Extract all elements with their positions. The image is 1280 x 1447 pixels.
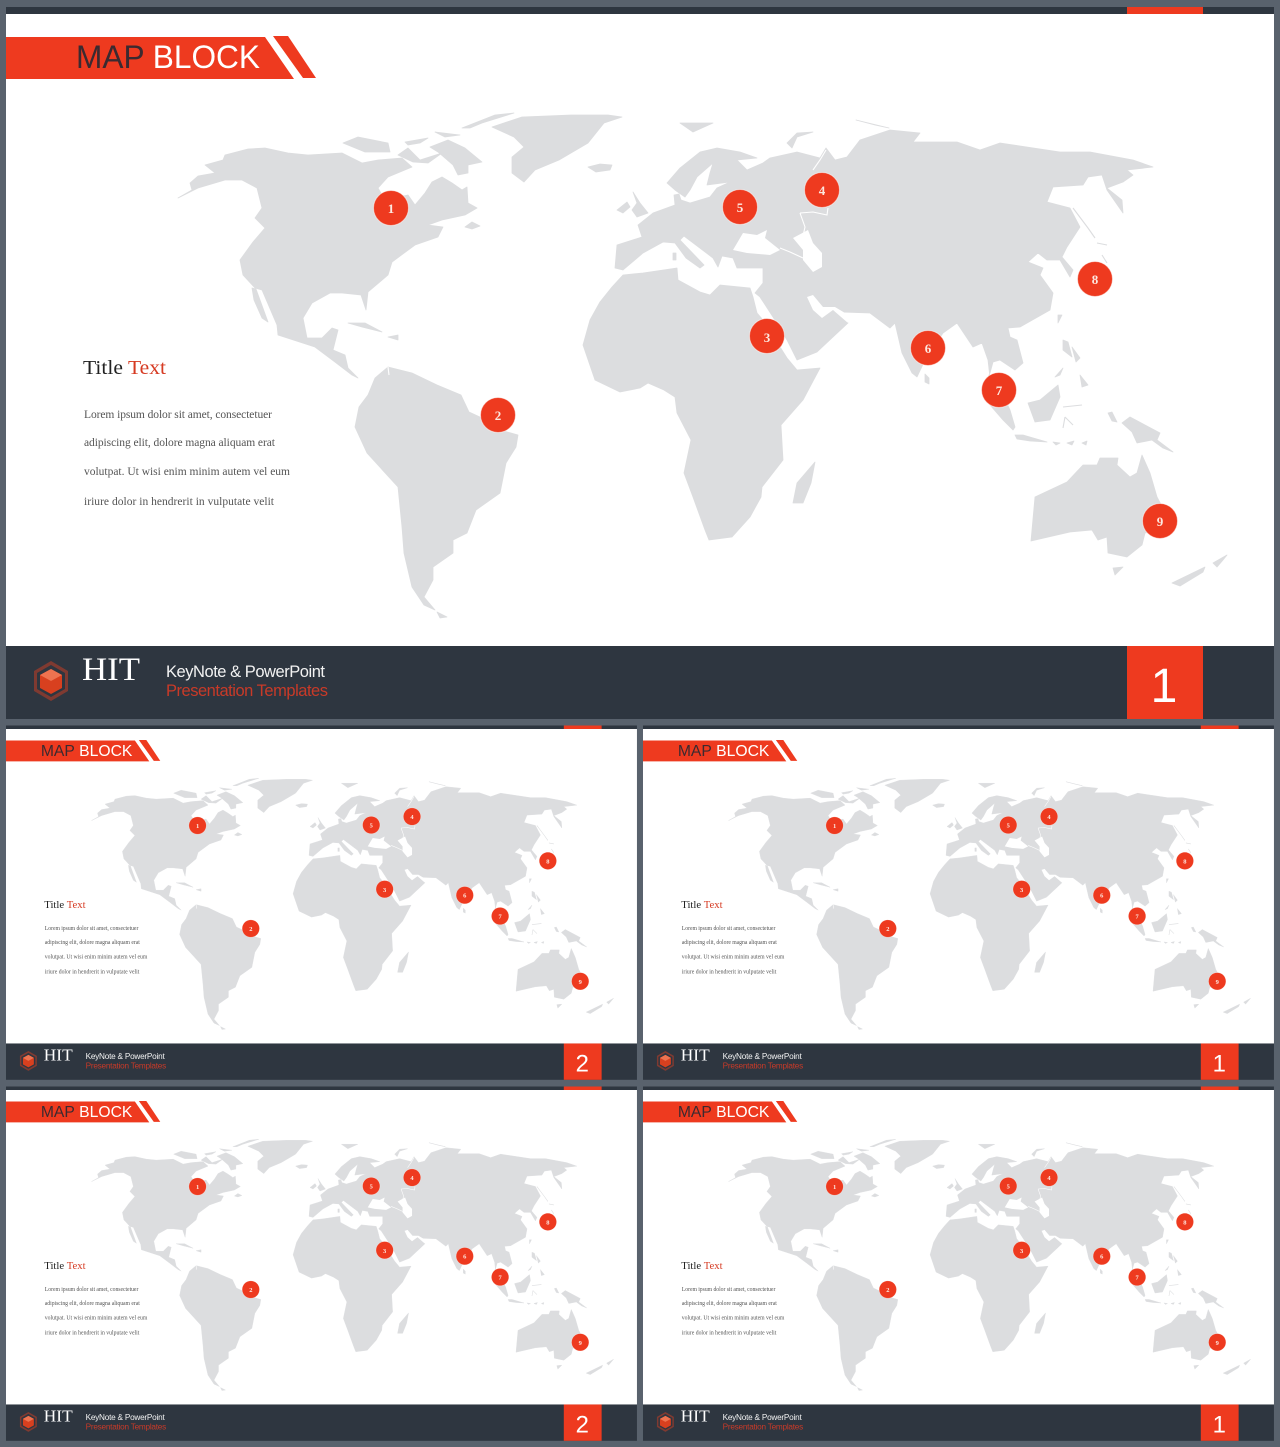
slide body xyxy=(6,14,1274,646)
panel: bottom-left thumbnail: 7 xyxy=(498,1275,502,1282)
panel: top-left thumbnail: Lorem ipsum dolor sit amet, consectetuer xyxy=(45,926,138,932)
panel: bottom-right thumbnail: volutpat. Ut wisi enim minim autem vel eum xyxy=(682,1315,785,1321)
panel: bottom-left thumbnail: 1 xyxy=(196,1184,199,1191)
panel: bottom-right thumbnail: 6 xyxy=(1100,1254,1104,1261)
icon: hexagon cube logo xyxy=(34,661,68,701)
panel: bottom-right thumbnail: 4 xyxy=(1047,1175,1051,1182)
panel: bottom-left thumbnail xyxy=(6,1087,637,1441)
panel: top-right thumbnail: Lorem ipsum dolor sit amet, consectetuer xyxy=(682,926,775,932)
panel: bottom-right thumbnail xyxy=(643,1087,1274,1441)
panel: bottom-left thumbnail: 9 xyxy=(579,1340,582,1347)
panel: top-right thumbnail: 8 xyxy=(1183,858,1187,865)
panel: top-right thumbnail: 7 xyxy=(1135,914,1139,921)
footer tagline: Presentation Templates xyxy=(166,682,328,700)
panel: top-right thumbnail: 3 xyxy=(1020,887,1023,894)
map pins: 8 xyxy=(1092,272,1099,287)
panel: bottom-left thumbnail: iriure dolor in hendrerit in vulputate velit xyxy=(45,1330,140,1336)
panel: top-right thumbnail: 9 xyxy=(1216,979,1219,986)
panel: bottom-right thumbnail: 3 xyxy=(1020,1248,1023,1255)
map pins: 6 xyxy=(925,341,932,356)
panel: bottom-left thumbnail: 4 xyxy=(410,1175,414,1182)
panel: top-left thumbnail: HIT xyxy=(44,1045,73,1064)
panel: top-right thumbnail: Presentation Templates xyxy=(723,1061,803,1070)
panel: top-right thumbnail: MAP BLOCK xyxy=(678,743,770,760)
panel: top-left thumbnail: 1 xyxy=(196,823,199,830)
panel: bottom-right thumbnail: 1 xyxy=(1213,1411,1226,1438)
panel: bottom-right thumbnail: Lorem ipsum dolor sit amet, consectetuer xyxy=(682,1287,775,1293)
panel: top-left thumbnail: 6 xyxy=(463,893,467,900)
panel: top-left thumbnail: 7 xyxy=(498,914,502,921)
panel: top-left thumbnail: KeyNote & PowerPoint xyxy=(86,1052,165,1061)
panel: bottom-left thumbnail: KeyNote & PowerPoint xyxy=(86,1413,165,1422)
panel: top-left thumbnail: 2 xyxy=(576,1050,589,1077)
body text xyxy=(84,409,290,508)
panel: bottom-left thumbnail: 5 xyxy=(370,1184,373,1191)
panel: top-left thumbnail: 5 xyxy=(370,823,373,830)
panel: bottom-right thumbnail: Presentation Templates xyxy=(723,1422,803,1431)
slide number: 1 xyxy=(1151,660,1177,713)
top red tab xyxy=(1127,7,1203,14)
world map xyxy=(178,113,1227,618)
panel: top-left thumbnail: adipiscing elit, dolore magna aliquam erat xyxy=(45,940,140,946)
panel: top-right thumbnail: iriure dolor in hendrerit in vulputate velit xyxy=(682,969,777,975)
panel: top-right thumbnail: 1 xyxy=(833,823,836,830)
heading banner xyxy=(6,36,316,79)
map pins: 7 xyxy=(996,383,1003,398)
panel: top-right thumbnail: HIT xyxy=(681,1045,710,1064)
panel: top-left thumbnail: 2 xyxy=(249,926,252,933)
panel: bottom-left thumbnail: Lorem ipsum dolor sit amet, consectetuer xyxy=(45,1287,138,1293)
panel: bottom-right thumbnail: iriure dolor in hendrerit in vulputate velit xyxy=(682,1330,777,1336)
panel: bottom-right thumbnail: 1 xyxy=(833,1184,836,1191)
heading banner: MAP BLOCK xyxy=(76,39,260,75)
panel: top-left thumbnail: Presentation Templates xyxy=(86,1061,166,1070)
footer tagline xyxy=(166,663,328,700)
panel: top-right thumbnail: 4 xyxy=(1047,814,1051,821)
body text: Lorem ipsum dolor sit amet, consectetuer xyxy=(84,409,272,421)
panel: top-left thumbnail: 3 xyxy=(383,887,386,894)
panel: top-right thumbnail: volutpat. Ut wisi enim minim autem vel eum xyxy=(682,954,785,960)
brand name: HIT xyxy=(82,652,140,688)
panel: top-left thumbnail: 9 xyxy=(579,979,582,986)
panel: bottom-left thumbnail: Presentation Templates xyxy=(86,1422,166,1431)
panel: top-left thumbnail: 8 xyxy=(546,858,550,865)
panel: bottom-right thumbnail: 7 xyxy=(1135,1275,1139,1282)
panel: top-right thumbnail: adipiscing elit, dolore magna aliquam erat xyxy=(682,940,777,946)
map pins: 9 xyxy=(1157,514,1164,529)
map pins: 3 xyxy=(764,330,771,345)
panel: bottom-left thumbnail: 2 xyxy=(249,1287,252,1294)
top strip xyxy=(6,7,1274,14)
panel: top-left thumbnail: volutpat. Ut wisi enim minim autem vel eum xyxy=(45,954,148,960)
panel: bottom-left thumbnail: 6 xyxy=(463,1254,467,1261)
panel: top-right thumbnail: 6 xyxy=(1100,893,1104,900)
panel: bottom-right thumbnail: 8 xyxy=(1183,1219,1187,1226)
panel: top-right thumbnail: 5 xyxy=(1007,823,1010,830)
panel: bottom-right thumbnail: 2 xyxy=(886,1287,889,1294)
panel: bottom-right thumbnail: 5 xyxy=(1007,1184,1010,1191)
panel: bottom-right thumbnail: Title Text xyxy=(681,1261,723,1272)
panel: top-right thumbnail: KeyNote & PowerPoint xyxy=(723,1052,802,1061)
slide number xyxy=(1127,646,1203,719)
panel: bottom-right thumbnail: HIT xyxy=(681,1406,710,1425)
panel: bottom-right thumbnail: MAP BLOCK xyxy=(678,1104,770,1121)
panel: bottom-right thumbnail: 9 xyxy=(1216,1340,1219,1347)
body text: adipiscing elit, dolore magna aliquam erat xyxy=(84,437,276,449)
panel: bottom-left thumbnail: 8 xyxy=(546,1219,550,1226)
body text: volutpat. Ut wisi enim minim autem vel eum xyxy=(84,466,290,478)
panel: top-left thumbnail: 4 xyxy=(410,814,414,821)
panel: bottom-left thumbnail: volutpat. Ut wisi enim minim autem vel eum xyxy=(45,1315,148,1321)
map pins: 1 xyxy=(388,201,394,216)
panel: bottom-left thumbnail: 2 xyxy=(576,1411,589,1438)
panel: top-right thumbnail: 1 xyxy=(1213,1050,1226,1077)
map pins: 2 xyxy=(495,408,501,423)
panel: top-left thumbnail xyxy=(6,726,637,1080)
body text: iriure dolor in hendrerit in vulputate velit xyxy=(84,496,275,508)
panel: bottom-right thumbnail: adipiscing elit, dolore magna aliquam erat xyxy=(682,1301,777,1307)
panel: bottom-left thumbnail: 3 xyxy=(383,1248,386,1255)
panel: top-left thumbnail: iriure dolor in hendrerit in vulputate velit xyxy=(45,969,140,975)
panel: top-right thumbnail: Title Text xyxy=(681,900,723,911)
title text: Title Text xyxy=(83,357,166,379)
panel: bottom-right thumbnail: KeyNote & PowerPoint xyxy=(723,1413,802,1422)
panel: bottom-left thumbnail: adipiscing elit, dolore magna aliquam erat xyxy=(45,1301,140,1307)
panel: top-left thumbnail: Title Text xyxy=(44,900,86,911)
panel: top-right thumbnail: 2 xyxy=(886,926,889,933)
panel: top-left thumbnail: MAP BLOCK xyxy=(41,743,133,760)
map pins xyxy=(374,172,1178,538)
footer bar xyxy=(6,646,1274,719)
panel: top-right thumbnail xyxy=(643,726,1274,1080)
map pins: 4 xyxy=(819,183,826,198)
panel: bottom-left thumbnail: HIT xyxy=(44,1406,73,1425)
panel: main slide xyxy=(6,7,1274,719)
panel: bottom-left thumbnail: MAP BLOCK xyxy=(41,1104,133,1121)
map pins: 5 xyxy=(737,200,744,215)
panel: bottom-left thumbnail: Title Text xyxy=(44,1261,86,1272)
footer tagline: KeyNote & PowerPoint xyxy=(166,663,325,681)
